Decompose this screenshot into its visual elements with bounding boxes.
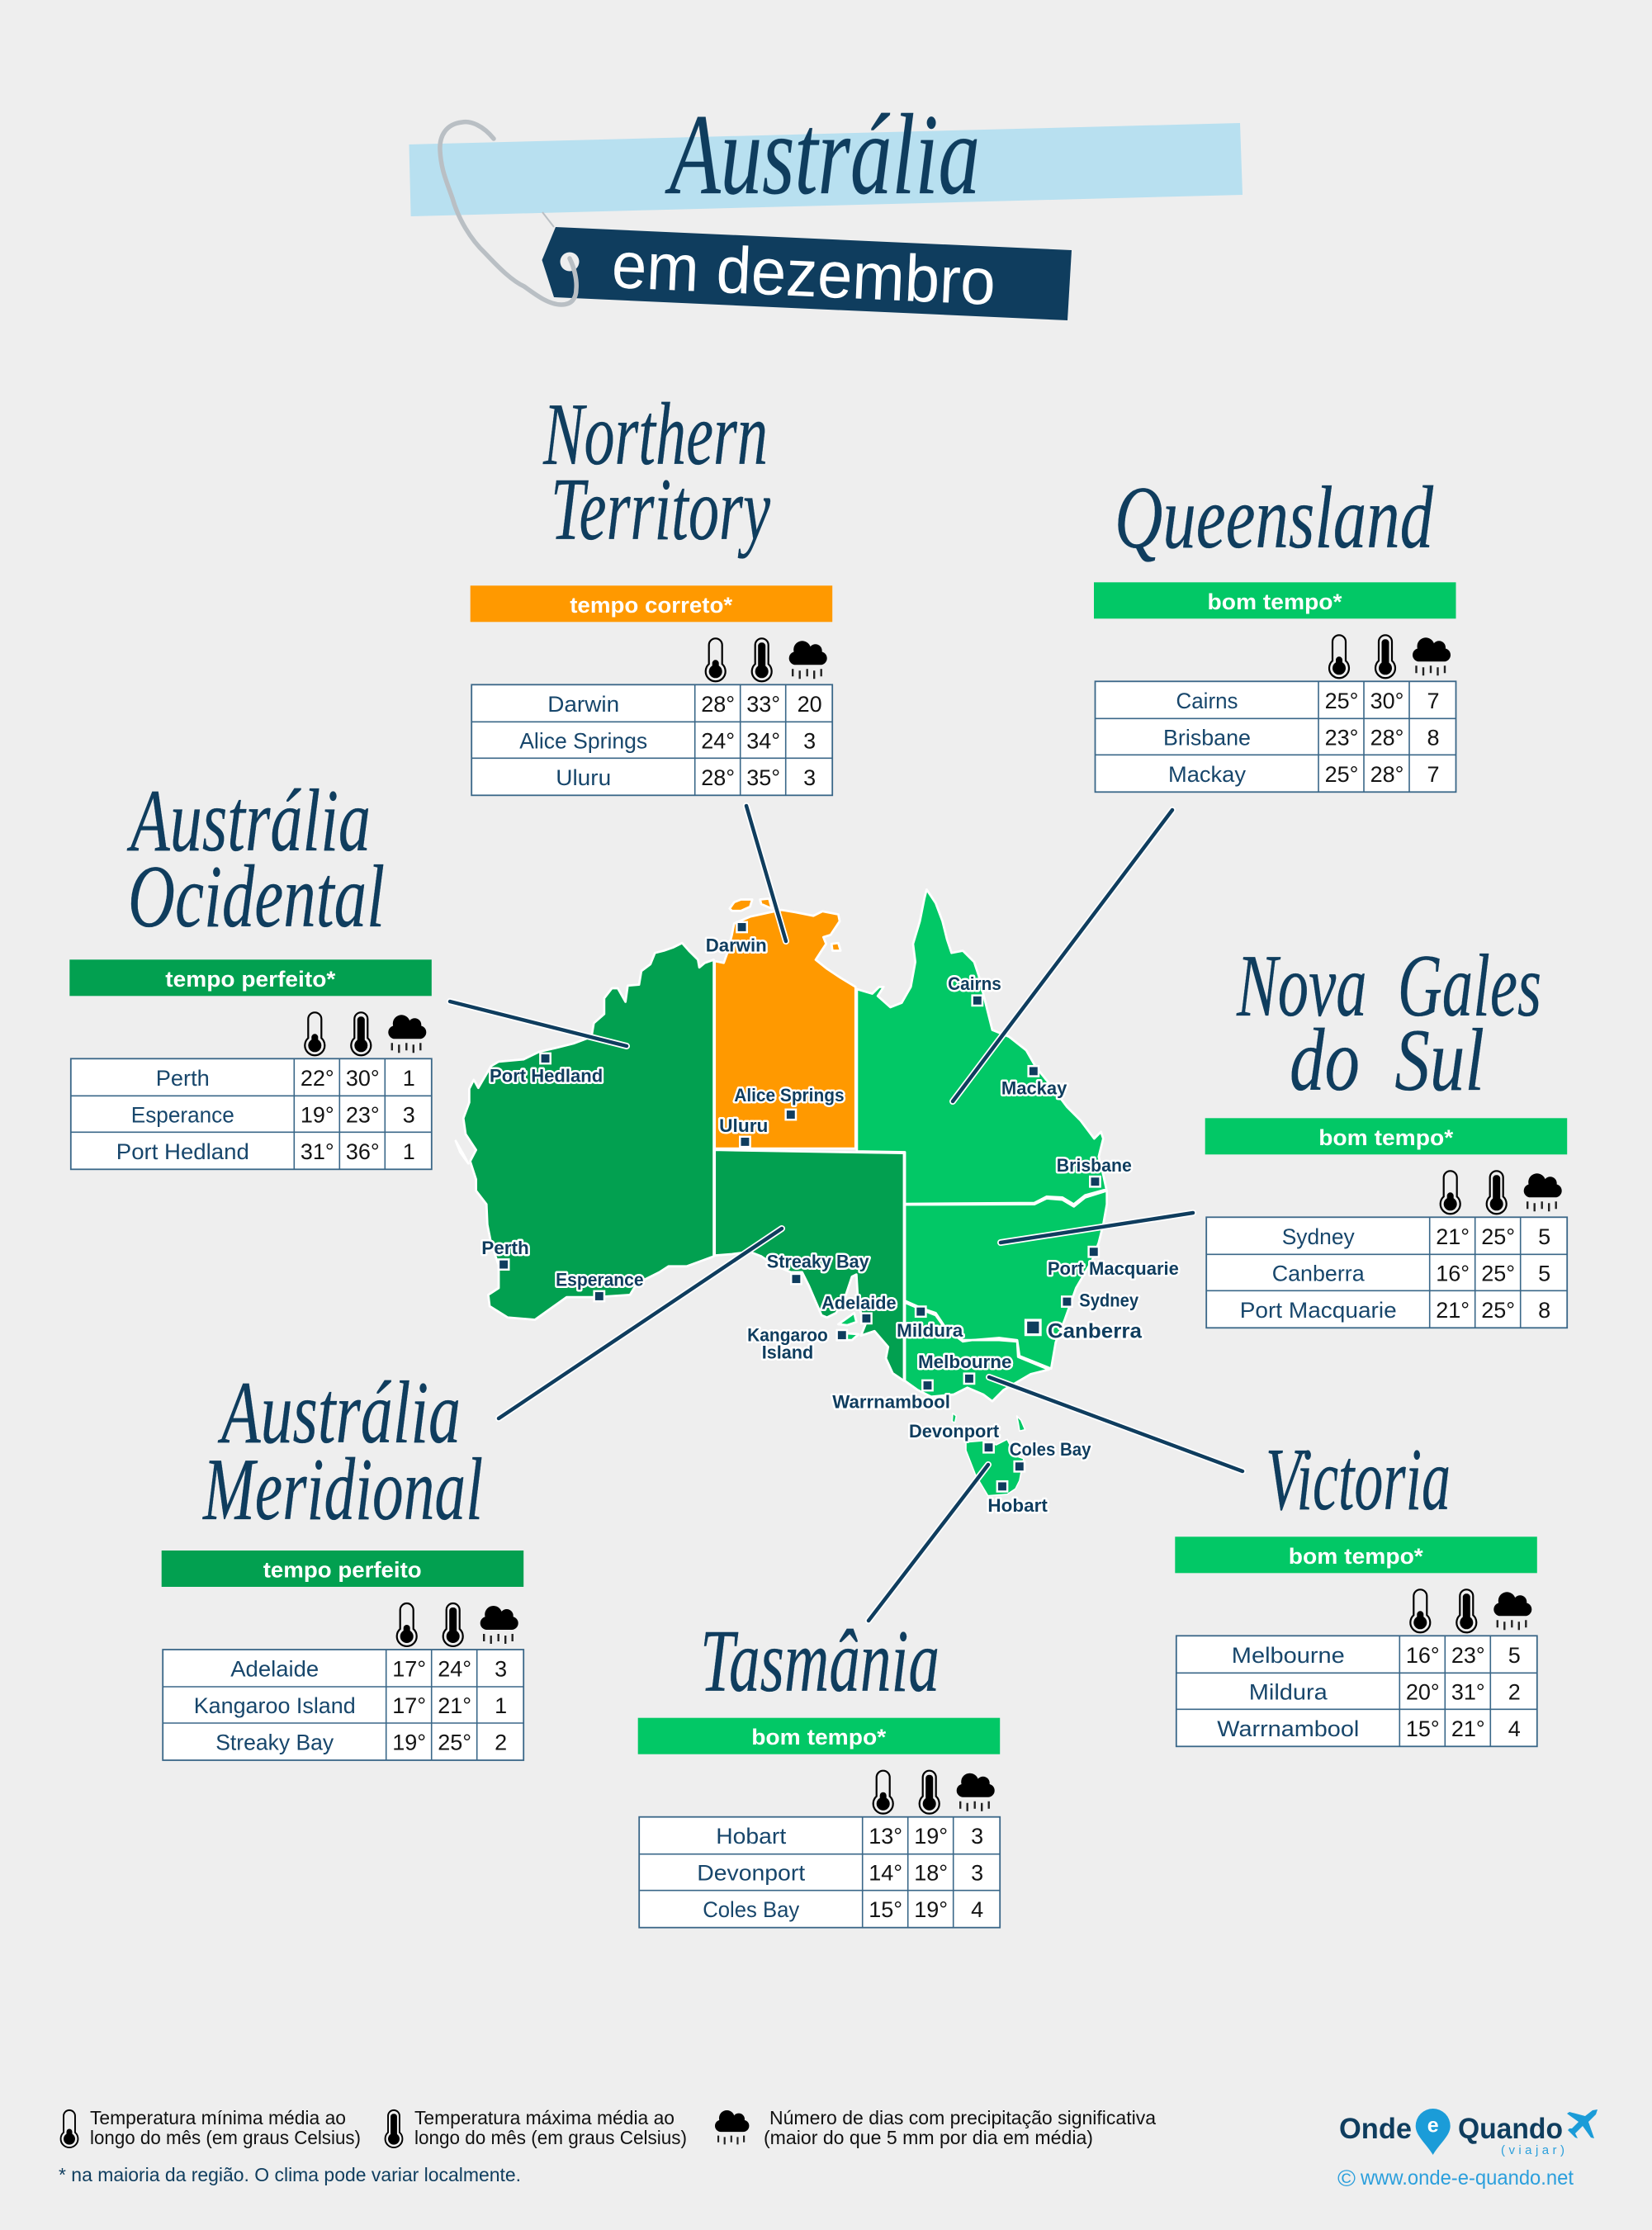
weather table: 3: [495, 1656, 507, 1681]
weather table: Warrnambool: [1217, 1716, 1359, 1741]
weather table: Mildura: [1249, 1679, 1328, 1704]
region: Victoria: [905, 1303, 1048, 1401]
tag ring: [440, 122, 576, 305]
city labels: Canberra: [1048, 1319, 1143, 1342]
legend text: rain: Número de dias com precipitação significativa: [769, 2107, 1156, 2128]
weather table: Streaky Bay: [215, 1730, 334, 1755]
city labels: Uluru: [719, 1115, 768, 1136]
weather table: 21°: [1436, 1298, 1470, 1323]
weather table: 4: [971, 1897, 983, 1922]
region title: Meridional: [202, 1441, 483, 1539]
leader lines: [450, 806, 1243, 1621]
weather table: 3: [803, 728, 816, 753]
city labels: Devonport: [909, 1421, 1000, 1442]
panel: Northern Territory: [471, 386, 832, 795]
weather table: 3: [403, 1102, 415, 1127]
weather table: Adelaide: [230, 1656, 319, 1681]
weather table: [638, 1718, 1000, 1928]
wordmark: Quando: Quando: [1458, 2113, 1563, 2145]
weather table: 23°: [1325, 725, 1358, 750]
city labels: Cairns: [948, 973, 1001, 994]
region title: [542, 386, 770, 559]
city labels: Melbourne: [918, 1352, 1011, 1372]
weather table: Port Macquarie: [1240, 1298, 1397, 1323]
weather table: 5: [1508, 1643, 1521, 1668]
panel: Victoria: [1175, 1431, 1537, 1746]
region: New South Wales: [905, 1191, 1107, 1369]
weather table: Perth: [156, 1066, 210, 1091]
city labels: Mildura: [897, 1320, 963, 1341]
pin letter: e: [1427, 2114, 1439, 2137]
weather table: 21°: [1451, 1716, 1485, 1741]
panel: New South Wales: [1205, 937, 1567, 1328]
weather table: 25°: [1325, 689, 1358, 713]
weather table: 8: [1427, 725, 1440, 750]
city labels: Kangaroo: [747, 1324, 828, 1345]
weather table: Mackay: [1168, 762, 1246, 787]
weather table: 25°: [1325, 762, 1358, 787]
weather table: 3: [971, 1861, 983, 1886]
weather table: 21°: [438, 1693, 471, 1718]
weather table: Melbourne: [1232, 1643, 1345, 1668]
city labels: Alice Springs: [734, 1085, 845, 1106]
weather table: 13°: [869, 1824, 902, 1849]
region title: Northern: [542, 386, 768, 484]
weather table: Sydney: [1282, 1224, 1355, 1249]
weather table: 16°: [1436, 1261, 1470, 1285]
city labels: Esperance: [556, 1269, 644, 1290]
weather table: 33°: [746, 692, 780, 717]
weather table: 23°: [346, 1102, 380, 1127]
region title: [1236, 937, 1541, 1110]
weather table: Darwin: [547, 692, 619, 717]
city labels: Darwin: [706, 935, 767, 956]
weather table: [162, 1551, 523, 1760]
legend text: minimum: longo do mês (em graus Celsius): [90, 2127, 361, 2148]
weather table: Kangaroo Island: [194, 1693, 356, 1718]
weather table: 19°: [392, 1730, 426, 1755]
tag hole: [560, 253, 580, 271]
icon: rain days: [715, 2110, 749, 2144]
weather table: 19°: [301, 1102, 334, 1127]
weather table: 25°: [438, 1730, 471, 1755]
region title: Territory: [551, 461, 770, 559]
region title: Tasmânia: [700, 1612, 940, 1711]
weather table: 5: [1538, 1224, 1550, 1249]
weather table: 8: [1538, 1298, 1550, 1323]
region title: do Sul: [1290, 1011, 1484, 1110]
panel: Queensland: [1094, 469, 1456, 792]
weather table: 30°: [1370, 689, 1403, 713]
city labels: Port Macquarie: [1048, 1258, 1179, 1279]
city labels: Coles Bay: [1010, 1439, 1091, 1460]
weather table: Hobart: [716, 1824, 787, 1849]
weather table: 24°: [701, 728, 735, 753]
weather table: 28°: [701, 692, 735, 717]
city labels: Sydney: [1079, 1290, 1139, 1311]
weather table: 28°: [701, 765, 735, 790]
city markers and labels: [481, 923, 1179, 1516]
city labels: [481, 935, 1179, 1516]
icon: minimum temperature: [61, 2110, 78, 2147]
weather table: 30°: [346, 1066, 380, 1091]
weather table: bom tempo*: [1318, 1125, 1454, 1150]
weather table: 34°: [746, 728, 780, 753]
legend: [59, 2107, 1156, 2185]
wordmark: Onde: Onde: [1339, 2113, 1412, 2145]
weather table: bom tempo*: [1207, 589, 1342, 614]
region: Kangaroo Island and Yorke: [838, 1313, 859, 1340]
region title: Queensland: [1115, 469, 1434, 567]
weather table: 1: [403, 1139, 415, 1164]
title block: [409, 91, 1243, 320]
subheading: em dezembro: em dezembro: [610, 228, 997, 319]
weather table: 20: [798, 692, 822, 717]
website: www.onde-e-quando.net: [1360, 2166, 1574, 2190]
weather table: Port Hedland: [116, 1139, 249, 1164]
city labels: Brisbane: [1057, 1155, 1132, 1176]
heading: Austrália: Austrália: [665, 91, 980, 219]
city labels: Island: [762, 1342, 813, 1363]
weather table: 17°: [392, 1656, 426, 1681]
legend text: maximum: Temperatura máxima média ao: [414, 2107, 675, 2128]
weather table: Uluru: [556, 765, 611, 790]
tag string back: [542, 212, 554, 227]
region title: Ocidental: [128, 848, 385, 946]
weather table: 3: [971, 1824, 983, 1849]
weather table: Coles Bay: [703, 1897, 800, 1922]
region: Northern Territory: [715, 898, 855, 1148]
legend text: rain: (maior do que 5 mm por dia em média): [764, 2127, 1093, 2148]
tag: [542, 227, 1072, 320]
weather table: Alice Springs: [519, 728, 647, 753]
weather table: 16°: [1406, 1643, 1440, 1668]
weather table: 15°: [869, 1897, 902, 1922]
weather table: 1: [495, 1693, 507, 1718]
weather table: [471, 585, 832, 795]
weather table: [1175, 1536, 1537, 1746]
weather table: 20°: [1406, 1679, 1440, 1704]
legend text: rain: [764, 2107, 1156, 2148]
icon: map pin: [1416, 2109, 1451, 2155]
weather table: bom tempo*: [751, 1725, 887, 1749]
weather table: 28°: [1370, 762, 1403, 787]
weather table: 24°: [438, 1656, 471, 1681]
city labels: Hobart: [987, 1495, 1048, 1516]
weather table: 19°: [914, 1824, 948, 1849]
weather table: tempo perfeito*: [165, 967, 336, 992]
footnote: * na maioria da região. O clima pode variar localmente.: [59, 2164, 521, 2185]
weather table: 5: [1538, 1261, 1550, 1285]
city labels: Perth: [481, 1238, 529, 1258]
region title: Victoria: [1266, 1431, 1451, 1529]
region title: Austrália: [218, 1364, 461, 1462]
weather table: 18°: [914, 1861, 948, 1886]
weather table: tempo perfeito: [263, 1557, 422, 1582]
city labels: Port Hedland: [490, 1066, 603, 1087]
legend text: maximum: longo do mês (em graus Celsius): [414, 2127, 687, 2148]
icon: maximum temperature: [386, 2110, 402, 2147]
panel: South Australia: [162, 1364, 523, 1760]
weather table: bom tempo*: [1289, 1544, 1423, 1569]
region: South Australia: [715, 1150, 904, 1381]
panel: Tasmania: [638, 1612, 1000, 1928]
weather table: 7: [1427, 762, 1440, 787]
weather table: 31°: [301, 1139, 334, 1164]
weather table: 23°: [1451, 1643, 1485, 1668]
weather table: 21°: [1436, 1224, 1470, 1249]
logo: [1337, 2109, 1598, 2191]
weather table: tempo correto*: [570, 593, 733, 618]
weather table: 15°: [1406, 1716, 1440, 1741]
weather table: 4: [1508, 1716, 1521, 1741]
city labels: Warrnambool: [832, 1391, 950, 1412]
weather table: [1205, 1118, 1567, 1328]
weather table: 25°: [1481, 1224, 1515, 1249]
legend text: maximum: [414, 2107, 687, 2148]
tagline: (viajar): [1501, 2143, 1564, 2157]
title band: [409, 123, 1243, 216]
copyright mark: ©: [1337, 2166, 1356, 2191]
weather table: 14°: [869, 1861, 902, 1886]
weather table: Canberra: [1272, 1261, 1366, 1285]
icon: plane: [1567, 2109, 1598, 2138]
city labels: Mackay: [1001, 1077, 1067, 1098]
region: Western Australia: [456, 943, 714, 1319]
weather table: Cairns: [1176, 689, 1238, 713]
weather table: 2: [495, 1730, 507, 1755]
region title: [202, 1364, 483, 1539]
weather table: 35°: [746, 765, 780, 790]
weather table: 1: [403, 1066, 415, 1091]
weather table: 17°: [392, 1693, 426, 1718]
weather table: 28°: [1370, 725, 1403, 750]
panel: Western Australia: [69, 772, 432, 1169]
region title: [127, 772, 385, 946]
legend text: minimum: Temperatura mínima média ao: [90, 2107, 346, 2128]
weather table: 31°: [1451, 1679, 1485, 1704]
region: Queensland: [857, 889, 1106, 1205]
weather table: [1094, 582, 1456, 792]
weather table: Devonport: [697, 1861, 806, 1886]
weather table: 7: [1427, 689, 1440, 713]
weather table: [69, 959, 432, 1169]
region: Tasmania: [952, 1413, 1025, 1496]
weather table: 3: [803, 765, 816, 790]
weather table: Brisbane: [1163, 725, 1251, 750]
city labels: Adelaide: [821, 1292, 897, 1313]
city labels: Streaky Bay: [767, 1251, 870, 1271]
region title: Austrália: [127, 772, 371, 870]
map of Australia: [456, 889, 1107, 1496]
weather table: 25°: [1481, 1261, 1515, 1285]
weather table: 25°: [1481, 1298, 1515, 1323]
legend text: minimum: [90, 2107, 361, 2148]
weather table: 36°: [346, 1139, 380, 1164]
weather table: 19°: [914, 1897, 948, 1922]
weather table: Esperance: [131, 1102, 234, 1127]
markers: [499, 923, 1099, 1490]
weather table: 22°: [301, 1066, 334, 1091]
weather table: 2: [1508, 1679, 1521, 1704]
